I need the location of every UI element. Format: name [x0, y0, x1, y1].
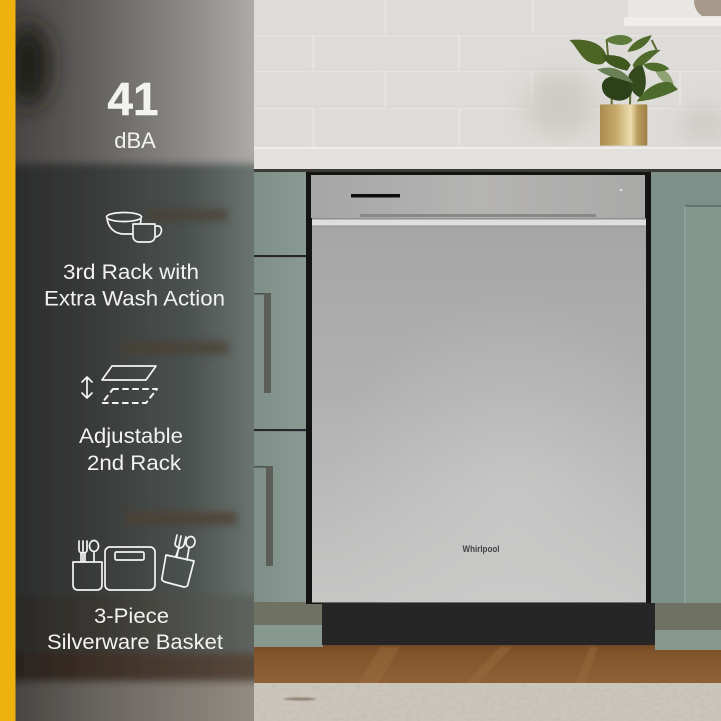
dishwasher [306, 172, 655, 645]
blurred left panel [16, 0, 254, 721]
stat: 41 dBA [107, 73, 159, 153]
feature: 3rd rack: 3rd Rack with [63, 260, 199, 284]
countertop [240, 147, 721, 172]
feature: 3rd rack: Extra Wash Action [44, 286, 225, 310]
door panel [312, 226, 646, 602]
feature: silverware basket: Silverware Basket [47, 630, 223, 654]
feature: adjustable rack: 2nd Rack [87, 451, 181, 475]
rug [240, 683, 721, 721]
feature: 3rd rack [44, 212, 225, 310]
icon: bowl and cup [106, 212, 161, 242]
feature: silverware basket: 3-Piece [94, 604, 169, 628]
stat: 41 dBA: dBA [114, 128, 156, 153]
feature: adjustable rack [79, 366, 183, 475]
wall shelf with vase [624, 0, 721, 26]
door handle [312, 218, 646, 226]
left base cabinet [240, 172, 330, 647]
accent bar [0, 0, 16, 721]
feature: silverware basket [47, 535, 223, 654]
stat: 41 dBA: 41 [107, 73, 159, 125]
right base cabinet [648, 172, 721, 650]
icon: rack height [82, 366, 157, 403]
tiled wall [240, 0, 721, 150]
control panel [311, 175, 645, 218]
feature: adjustable rack: Adjustable [79, 424, 183, 448]
brand logo: Whirlpool [462, 544, 500, 555]
potted plant [569, 35, 678, 146]
floor [240, 640, 721, 684]
icon: three-piece basket [73, 535, 196, 590]
toe kick [322, 603, 655, 645]
